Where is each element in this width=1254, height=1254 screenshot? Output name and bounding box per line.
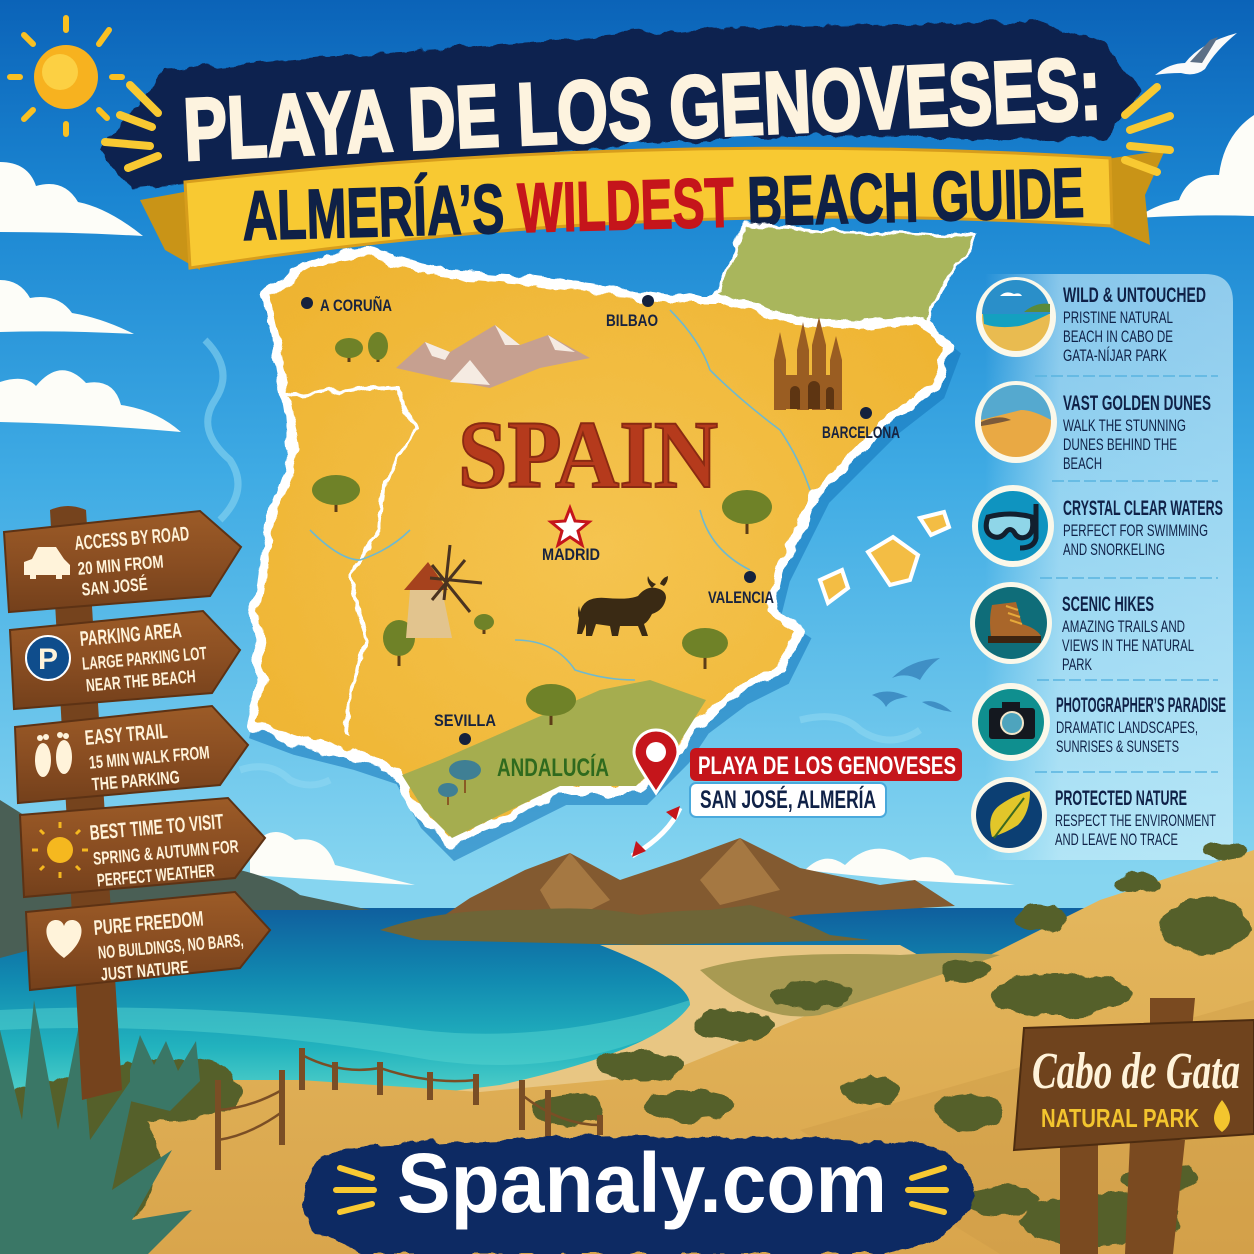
icon: bull xyxy=(577,576,668,636)
sea swirls xyxy=(205,340,920,785)
item: protected nature: AND LEAVE NO TRACE xyxy=(1055,830,1178,849)
sign: parking area: P xyxy=(38,643,58,676)
icon: Madrid star xyxy=(551,508,589,545)
item: golden dunes: WALK THE STUNNING xyxy=(1063,416,1186,435)
sign: pure freedom xyxy=(26,892,270,990)
sign: Cabo de Gata xyxy=(1014,998,1254,1254)
scene: landscape xyxy=(0,800,1254,1254)
item: golden dunes xyxy=(975,381,1211,473)
item: photographers paradise: SUNRISES & SUNSETS xyxy=(1056,737,1179,756)
icon: map pin xyxy=(634,730,678,793)
city labels: VALENCIA xyxy=(708,588,774,607)
title line 2: ALMERÍA’S WILDEST BEACH GUIDE xyxy=(241,154,1085,255)
callout: beach name xyxy=(690,748,962,781)
clouds xyxy=(0,115,1254,885)
city labels: SEVILLA xyxy=(434,711,496,730)
icon: small sun xyxy=(32,822,88,878)
sign: easy trail xyxy=(15,706,248,803)
icon: cathedral xyxy=(774,317,842,410)
city labels: MADRID xyxy=(542,545,600,564)
panel: location callout: SAN JOSÉ, ALMERÍA xyxy=(700,785,876,814)
website badge: Spanaly.com xyxy=(397,1136,887,1230)
sign: pure freedom: PURE FREEDOM xyxy=(93,907,204,940)
signpost: directions xyxy=(4,506,270,1100)
icon: trees xyxy=(312,332,772,725)
sign: access by road: 20 MIN FROM xyxy=(77,551,164,579)
item: golden dunes: DUNES BEHIND THE xyxy=(1063,435,1177,454)
map: islands xyxy=(820,512,949,603)
item: golden dunes: BEACH xyxy=(1063,454,1102,473)
item: scenic hikes: PARK xyxy=(1062,655,1092,674)
website badge xyxy=(303,1136,973,1254)
icon: P xyxy=(26,636,70,680)
item: scenic hikes xyxy=(970,582,1194,674)
brush backdrop xyxy=(100,22,1140,190)
item: wild and untouched xyxy=(976,277,1206,365)
item: photographers paradise xyxy=(972,683,1226,761)
left headland xyxy=(0,800,370,958)
sign: parking area xyxy=(10,611,240,709)
sign: Cabo de Gata: NATURAL PARK xyxy=(1041,1103,1199,1133)
icon: heart xyxy=(46,920,82,958)
foreground agave xyxy=(0,1000,200,1254)
label: Andalucia: ANDALUCÍA xyxy=(497,753,609,782)
dune field xyxy=(0,850,1254,1254)
sign: best time to visit: BEST TIME TO VISIT xyxy=(89,810,224,845)
sign: pure freedom: JUST NATURE xyxy=(100,957,189,985)
icon: dolphins xyxy=(872,658,952,712)
item: scenic hikes: AMAZING TRAILS AND xyxy=(1062,617,1185,636)
title sunburst rays xyxy=(105,85,1170,172)
sign: easy trail: THE PARKING xyxy=(91,767,180,795)
sign pole xyxy=(50,506,122,1100)
map: Andalucia region xyxy=(402,680,706,838)
item: scenic hikes: VIEWS IN THE NATURAL xyxy=(1062,636,1194,655)
city labels: BILBAO xyxy=(606,311,658,330)
fence xyxy=(218,1048,600,1170)
sign: access by road xyxy=(4,511,241,612)
sign: best time to visit: PERFECT WEATHER xyxy=(96,860,215,891)
map: France xyxy=(715,225,975,328)
item: wild and untouched: GATA-NÍJAR PARK xyxy=(1063,346,1167,365)
item: wild and untouched: PRISTINE NATURAL xyxy=(1063,308,1173,327)
item: crystal waters: AND SNORKELING xyxy=(1063,540,1165,559)
ribbon xyxy=(140,148,1165,270)
icon: sun xyxy=(10,18,122,134)
panel: location callout xyxy=(632,730,962,857)
sign: parking area: PARKING AREA xyxy=(79,619,183,651)
icon: Andalucia trees xyxy=(438,760,481,805)
item: protected nature xyxy=(971,777,1216,853)
icon: car xyxy=(24,547,70,579)
icon: windmill xyxy=(404,545,482,638)
map: Iberian peninsula xyxy=(250,250,950,845)
sign: easy trail: EASY TRAIL xyxy=(84,720,169,750)
item: scenic hikes: SCENIC HIKES xyxy=(1062,593,1154,616)
callout: location xyxy=(690,783,886,817)
panel: map of Spain xyxy=(250,225,975,855)
sign: parking area: LARGE PARKING LOT xyxy=(81,643,207,674)
item: crystal waters xyxy=(972,485,1223,567)
sign: access by road: ACCESS BY ROAD xyxy=(74,523,190,555)
panel: highlights xyxy=(970,274,1233,860)
sign: best time to visit xyxy=(20,798,265,897)
title banner xyxy=(100,22,1170,270)
label: SPAIN: SPAIN xyxy=(458,401,718,508)
far mountains xyxy=(430,838,955,935)
city labels: BARCELONA xyxy=(822,423,900,442)
distant sea xyxy=(0,908,1254,1108)
city labels: A CORUÑA xyxy=(320,295,392,315)
map shadow xyxy=(255,260,955,855)
item: wild and untouched: BEACH IN CABO DE xyxy=(1063,327,1173,346)
sign: best time to visit: SPRING & AUTUMN FOR xyxy=(92,836,239,869)
shrubs xyxy=(0,842,1250,1246)
icon: seagull xyxy=(1155,33,1237,75)
shoreline foam xyxy=(0,1000,690,1065)
icon: footprints xyxy=(35,732,72,777)
sign: parking area: NEAR THE BEACH xyxy=(85,666,196,696)
map: Portugal border xyxy=(290,385,415,735)
panel: location callout: PLAYA DE LOS GENOVESES xyxy=(698,752,956,780)
map: rivers xyxy=(310,310,810,680)
arrow xyxy=(632,808,680,856)
sign: pure freedom: NO BUILDINGS, NO BARS, xyxy=(97,930,244,963)
city labels xyxy=(301,295,900,745)
beach curve xyxy=(300,945,1000,1150)
sign: easy trail: 15 MIN WALK FROM xyxy=(88,742,210,773)
icon: mountains xyxy=(396,325,590,388)
sign: access by road: SAN JOSÉ xyxy=(81,573,148,600)
